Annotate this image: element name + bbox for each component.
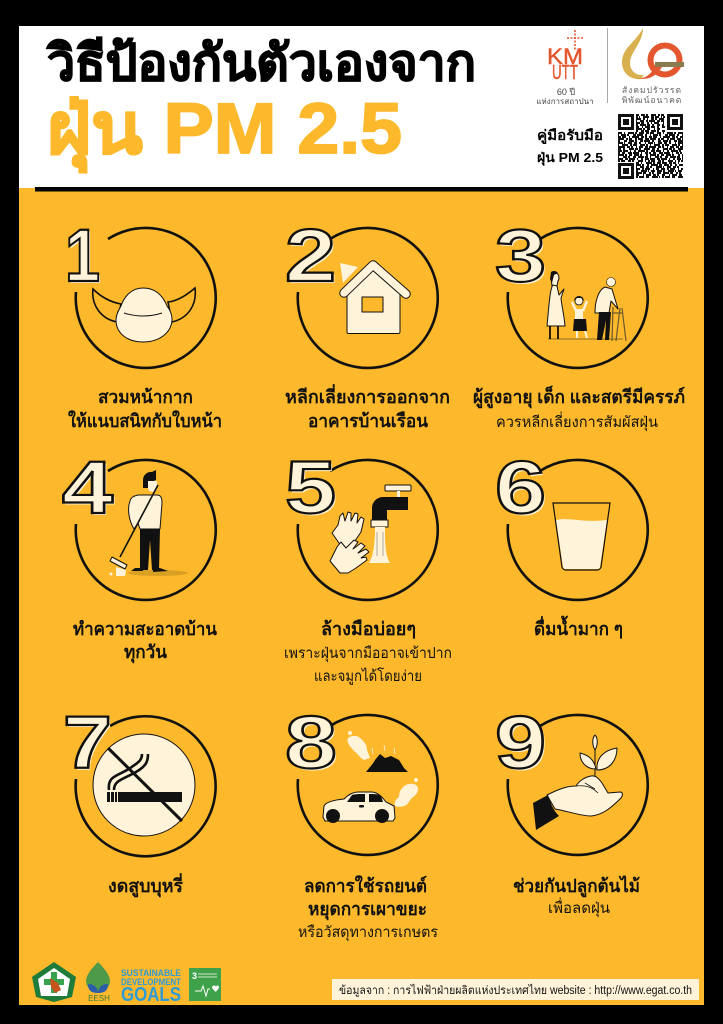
circle ring 3 [508,228,648,368]
numeral 4: 4 [64,448,115,531]
item 9: plant a tree [495,701,648,918]
caption 8 [298,875,438,942]
circle ring 9 [508,715,648,855]
numeral 3: 3 [495,214,546,297]
numeral 6: 6 [497,448,548,531]
caption 5: และจมูกได้โดยง่าย [314,667,422,685]
source note: ข้อมูลจาก : การไฟฟ้าฝ่ายผลิตแห่งประเทศไทย website : http://www.egat.co.th [339,984,692,997]
caption 5: เพราะฝุ่นจากมืออาจเข้าปาก [284,645,452,663]
logo: 60th anniversary [622,28,684,105]
logo: KMUTT: KM [547,44,583,69]
item 6: glass of water [495,446,648,639]
logo: sustainable development goals [121,968,181,1006]
logo: SDG 3: 3 [192,971,197,981]
circle ring 7 [76,716,216,856]
item 5: wash hands [284,446,452,685]
item 1: mask [65,214,222,431]
caption 2 [285,384,450,431]
icon: car with exhaust [323,778,418,823]
logo: sustainable development goals: GOALS [121,984,181,1006]
numeral 6: 6 [495,446,546,529]
circle ring 8 [298,715,438,855]
icon: burning pile [348,731,408,772]
caption 1: สวมหน้ากาก [98,387,193,407]
caption 5: ล้างมือบ่อยๆ [321,619,416,639]
numeral 1: 1 [65,214,100,297]
caption 1 [68,387,222,431]
caption 8: หรือวัสดุทางการเกษตร [298,924,438,942]
circle ring 4 [76,460,216,600]
logo: sustainable development goals: SUSTAINABLE [121,968,181,979]
icon: face mask [93,288,195,342]
numeral 5: 5 [285,446,336,529]
item 3: family [473,214,685,432]
panel: yellow body [19,188,704,1005]
logo: KMUTT [536,30,594,106]
logo: 60th anniversary: สังคมปรัวรรต [622,85,682,95]
item 8: cars and burning [285,701,438,942]
logo: EESH [86,962,110,1003]
caption 9: เพื่อลดฝุ่น [548,897,610,918]
caption 2: อาคารบ้านเรือน [308,411,429,431]
caption 9: ช่วยกันปลูกต้นไม้ [513,875,640,898]
item 7: no smoking [63,702,216,898]
numeral 5: 5 [287,448,338,531]
panel: white header [19,26,704,188]
caption 8: หยุดการเผาขยะ [308,899,427,921]
icon: hand holding seedling [533,735,622,830]
icon: man sweeping [110,470,188,576]
numeral 8: 8 [285,701,337,784]
QR caption: ฝุ่น PM 2.5 [537,150,603,166]
numeral 9: 9 [497,703,548,786]
item 2: house [285,214,450,431]
logo: EESH: EESH [88,994,110,1003]
numeral 2: 2 [287,216,338,299]
divider [607,28,608,103]
caption 4: ทุกวัน [124,642,168,664]
QR caption [537,127,603,166]
circle ring 1 [76,228,216,368]
numeral 3: 3 [497,216,548,299]
header rule [35,187,688,192]
caption 3: ควรหลีกเลี่ยงการสัมผัสฝุ่น [496,411,658,432]
icon: hands under faucet [330,485,411,573]
numeral 7: 7 [65,704,114,786]
logo: KMUTT: 60 ปี [557,87,575,97]
caption 1: ให้แนบสนิทกับใบหน้า [68,410,222,431]
caption 8: ลดการใช้รถยนต์ [304,875,427,896]
icon: house [340,263,406,334]
title line 2: ฝุ่น PM 2.5 [47,90,402,173]
logo: KMUTT: UTT [552,62,578,84]
caption 6: ดื่มน้ำมาก ๆ [534,615,623,639]
logo: 60th anniversary: พิพัฒน์อนาคต [622,95,682,105]
caption 2: หลีกเลี่ยงการออกจาก [285,384,450,407]
caption 4: ทำความสะอาดบ้าน [73,619,218,639]
numeral 2: 2 [285,214,336,297]
caption 7: งดสูบบุหรี่ [108,873,183,898]
caption 3 [473,385,685,432]
source note [332,979,699,1000]
caption 5 [284,619,452,685]
circle ring 6 [508,460,648,600]
circle ring 2 [298,228,438,368]
circle ring 5 [298,460,438,600]
caption 3: ผู้สูงอายุ เด็ก และสตรีมีครรภ์ [473,385,685,409]
caption 9 [513,875,640,918]
numeral 8: 8 [287,703,339,786]
numeral 9: 9 [495,701,546,784]
caption 4 [73,619,218,664]
numeral 7: 7 [63,702,112,784]
QR caption: คู่มือรับมือ [537,127,603,144]
numeral 4: 4 [62,446,113,529]
icon: no smoking sign [93,734,195,836]
icon: woman, child and elder [547,271,626,341]
QR code [618,114,683,179]
item 4: cleaning [62,446,218,664]
logo: KMUTT: แห่งการสถาปนา [536,97,594,106]
icon: glass of water [553,503,610,570]
logo: SDG 3 [189,968,221,1001]
title line 1: วิธีป้องกันตัวเองจาก [46,35,476,91]
logo: sustainable development goals: DEVELOPMENT [121,977,181,988]
numeral 1: 1 [67,216,102,299]
logo: health shield [32,962,76,1002]
